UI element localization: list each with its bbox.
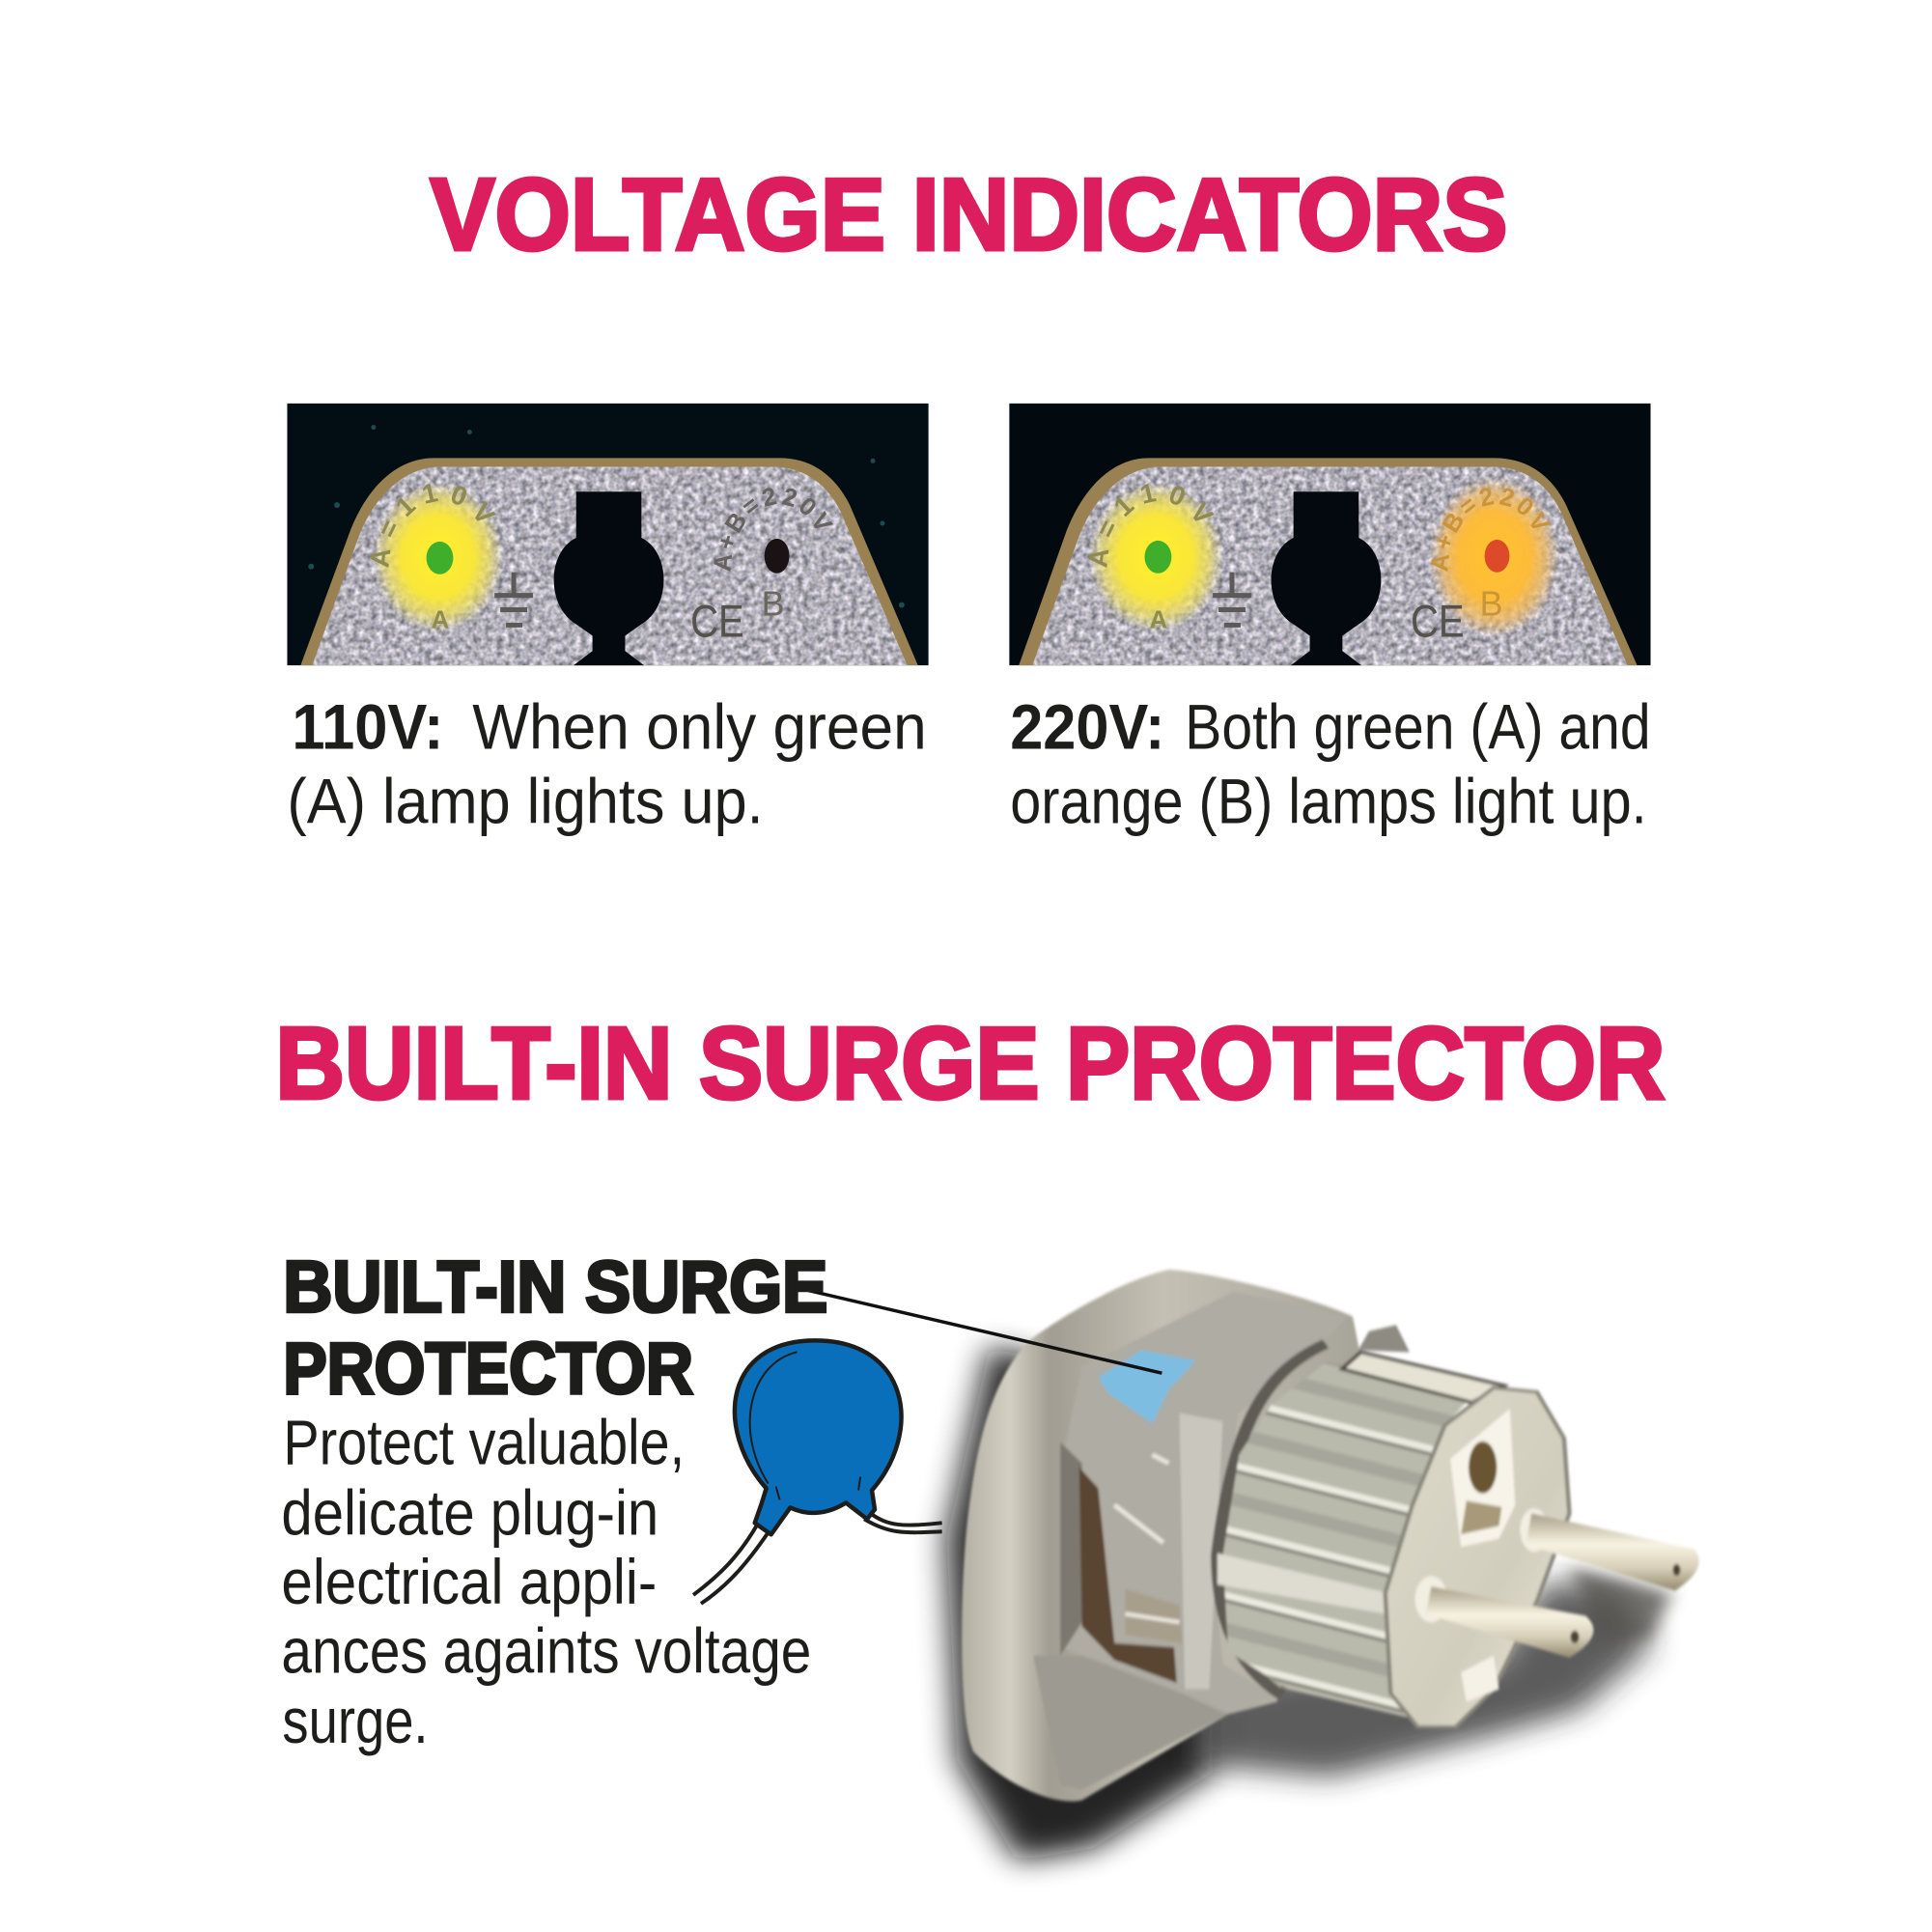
caption: 110V: (A) lamp lights up. — [287, 766, 764, 836]
arc label A=110V: A=110V — [1089, 484, 1215, 568]
contact strip top — [1342, 1352, 1504, 1403]
plug faceplate — [1032, 466, 1628, 666]
copper window — [1125, 1588, 1182, 1643]
caption: 110V — [287, 692, 927, 836]
callout leader line — [789, 1286, 1162, 1373]
round pin lower — [1426, 1586, 1593, 1658]
body text: Protect valuable, — [283, 1408, 685, 1478]
dark inner cavity — [1079, 1468, 1177, 1683]
capacitor left leads — [693, 1524, 769, 1604]
plug body outline — [1019, 458, 1638, 665]
ribbed cylinder — [1222, 1362, 1471, 1719]
cylinder light band — [1218, 1554, 1388, 1613]
housing left dark recess — [1060, 1442, 1084, 1656]
lamp letter B: B — [762, 584, 785, 623]
body text: delicate plug-in — [281, 1477, 658, 1548]
lamp letter A: A — [1149, 606, 1167, 633]
green lamp glow — [373, 482, 503, 631]
pin collar lower — [1415, 1576, 1447, 1622]
green lamp glow — [1089, 482, 1223, 631]
body text: electrical appli- — [281, 1547, 657, 1617]
caption: 220V: orange (B) lamps light up. — [1010, 766, 1647, 836]
icon: blue capacitor — [693, 1340, 942, 1604]
arc label A+B=220V: A+B=220V — [714, 488, 833, 572]
orange lamp glow — [1429, 476, 1559, 637]
photo: surge protector plug adapter — [946, 1270, 1699, 1861]
green lamp — [1144, 541, 1171, 574]
red lamp — [1485, 540, 1509, 573]
off lamp — [765, 539, 790, 574]
background specks — [308, 425, 905, 608]
caption: 110V: When only green — [472, 692, 927, 763]
body text: ances againts voltage — [281, 1615, 811, 1686]
body text: surge. — [282, 1686, 429, 1756]
socket keyhole — [554, 491, 663, 665]
clear housing — [1060, 1292, 1347, 1715]
body text — [281, 1408, 811, 1756]
earth socket hole — [1469, 1442, 1497, 1494]
socket keyhole — [1272, 491, 1381, 665]
lower inner face of base — [1033, 1656, 1228, 1790]
lamp letter B: B — [1480, 584, 1502, 623]
CE mark: CE — [1411, 596, 1465, 647]
top notch — [1358, 1325, 1410, 1352]
pin collar upper — [1520, 1508, 1549, 1552]
housing collar — [1218, 1344, 1326, 1695]
base plate — [962, 1270, 1363, 1802]
lamp letter A: A — [432, 606, 449, 633]
drop shadow under body — [1201, 1581, 1651, 1778]
shadow of pins — [1569, 1568, 1672, 1643]
CE mark: CE — [690, 596, 744, 647]
title: voltage indicators: VOLTAGE INDICATORS — [431, 159, 1507, 272]
arc label A=110V: A=110V — [371, 484, 496, 568]
drop shadow under base plate — [946, 1346, 1212, 1861]
subheading: built-in surge protector — [283, 1247, 827, 1410]
caption: 220V — [1010, 692, 1651, 836]
front face — [1386, 1387, 1569, 1727]
capacitor body — [735, 1340, 902, 1534]
caption: 110V: 110V: — [292, 692, 443, 763]
panel: 220V indicator photo — [1009, 404, 1651, 666]
earth contact — [1461, 1500, 1501, 1534]
clear panel highlights — [1114, 1455, 1180, 1622]
earth socket recess — [1450, 1409, 1515, 1547]
ground symbol — [1213, 573, 1251, 625]
caption: 220V: Both green (A) and — [1185, 692, 1651, 763]
subheading: built-in surge protector: BUILT-IN SURGE — [283, 1247, 827, 1329]
ground symbol — [494, 573, 533, 625]
plug body outline — [300, 458, 918, 665]
lower tab — [1461, 1656, 1499, 1702]
arc label A+B=220V: A+B=220V — [1431, 488, 1551, 572]
capacitor highlight crease — [750, 1352, 860, 1499]
blue capacitor inside — [1098, 1350, 1195, 1423]
panel: 110V indicator photo — [287, 404, 929, 666]
plug faceplate — [312, 466, 908, 666]
caption: 220V: 220V: — [1010, 692, 1164, 763]
title: built-in surge protector: BUILT-IN SURGE PROTECTOR — [275, 1008, 1666, 1121]
housing vertical strap — [1180, 1413, 1222, 1690]
capacitor right leads — [864, 1512, 942, 1532]
green lamp — [427, 542, 453, 574]
subheading: built-in surge protector: PROTECTOR — [283, 1329, 693, 1410]
plug photo body — [962, 1270, 1699, 1802]
round pin upper — [1526, 1513, 1699, 1591]
